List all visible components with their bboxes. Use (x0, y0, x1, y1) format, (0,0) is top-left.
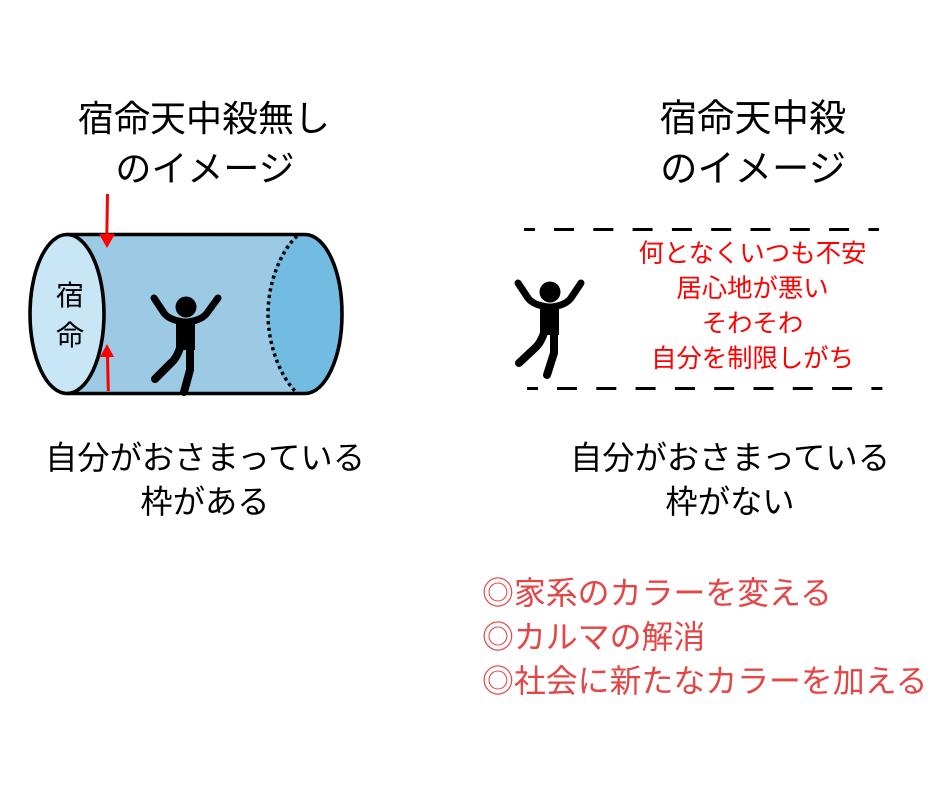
caption: right (570, 440, 890, 520)
arrow: top red arrow (99, 194, 115, 248)
cylinder outline (67, 234, 342, 394)
red list: ◎社会に新たなカラーを加える (482, 663, 928, 699)
heading: with shukumei tenchusatsu: のイメージ (660, 148, 846, 190)
icon: figure in cylinder (154, 296, 218, 392)
dashed boundary: top (524, 228, 879, 231)
arrow: bottom red arrow (100, 344, 114, 391)
label: shukumei: 宿 (56, 280, 84, 311)
red list: ◎カルマの解消 (482, 619, 705, 655)
caption: right: 自分がおさまっている (570, 440, 890, 476)
cylinder body (67, 234, 305, 394)
red symptom text (639, 240, 866, 373)
caption: left: 枠がある (140, 484, 270, 520)
red symptom text: 居心地が悪い (676, 275, 829, 303)
dashed boundary: bottom (527, 387, 883, 390)
red symptom text: そわそわ (702, 310, 803, 338)
red list (482, 575, 928, 699)
caption: right: 枠がない (665, 484, 795, 520)
red list: ◎家系のカラーを変える (482, 575, 832, 611)
heading: without shukumei tenchusatsu: 宿命天中殺無し (78, 98, 330, 139)
label: shukumei (56, 280, 84, 351)
red symptom text: 何となくいつも不安 (639, 240, 866, 268)
caption: left: 自分がおさまっている (45, 440, 365, 476)
heading: with shukumei tenchusatsu (660, 97, 846, 190)
heading: with shukumei tenchusatsu: 宿命天中殺 (660, 97, 846, 139)
cylinder illustration (30, 194, 342, 394)
caption: left (45, 440, 365, 520)
red symptom text: 自分を制限しがち (651, 345, 854, 373)
cylinder right end (268, 234, 342, 394)
dotted inner edge (268, 236, 297, 393)
heading: without shukumei tenchusatsu (78, 98, 330, 189)
heading: without shukumei tenchusatsu: のイメージ (115, 148, 295, 189)
icon: free figure (518, 282, 581, 375)
label: shukumei: 命 (56, 320, 84, 351)
cylinder left face (30, 234, 104, 394)
